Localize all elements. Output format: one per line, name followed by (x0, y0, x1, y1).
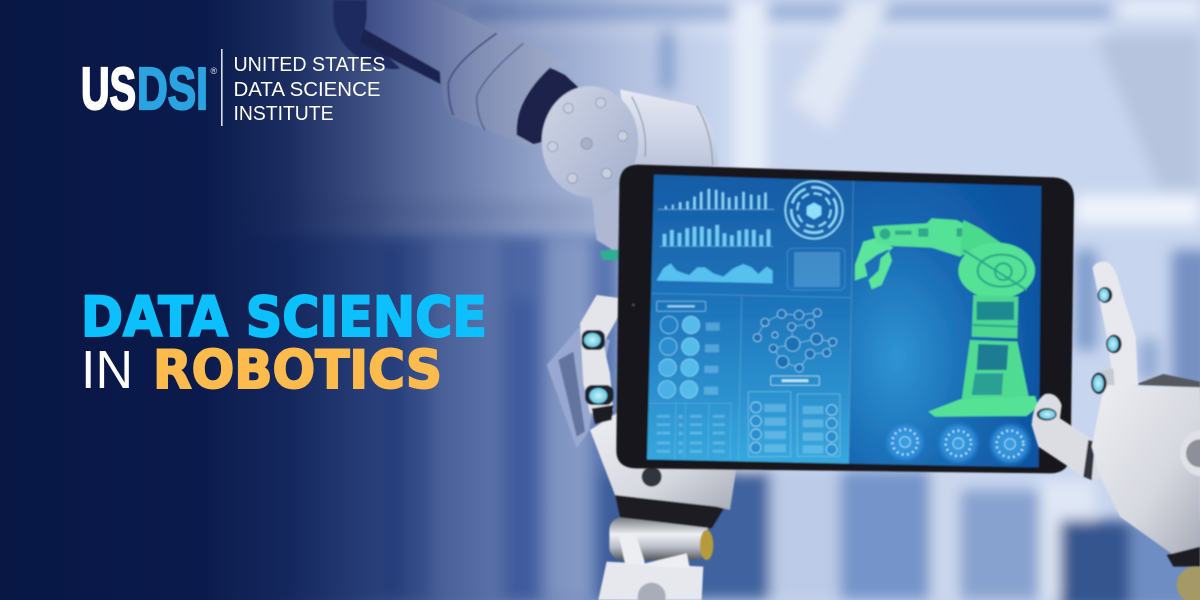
thumb (1032, 394, 1100, 480)
wrist band and hinge (1167, 547, 1200, 567)
usdsi logo: DSI (137, 56, 208, 122)
registered mark: ® (210, 66, 218, 76)
second finger stub (1094, 368, 1115, 397)
green robot arm hologram (855, 218, 1038, 417)
round joint (542, 86, 638, 197)
title: IN (81, 340, 133, 400)
robot arm, upper (333, 0, 718, 260)
gripper (855, 238, 893, 289)
screen right half (849, 181, 1041, 467)
knuckle band (1138, 374, 1200, 387)
fingers (580, 295, 622, 413)
info cards (748, 392, 840, 457)
data table (649, 403, 732, 459)
network diagram (753, 309, 837, 372)
robot right hand (1032, 262, 1200, 600)
upper cylinder (363, 0, 500, 87)
logo wordmark: US (81, 56, 136, 122)
index finger (1093, 262, 1138, 387)
title (81, 285, 487, 401)
dark wrist band (615, 493, 725, 528)
robot left hand (547, 295, 737, 600)
usdsi logo (81, 49, 386, 126)
panel divider lines (652, 181, 853, 464)
bar chart 2 (659, 225, 773, 247)
palm (1092, 385, 1200, 555)
tablet (616, 165, 1074, 473)
bar chart 1 (658, 189, 774, 210)
chrome wrist hinge (609, 517, 708, 560)
rear arm section (333, 0, 400, 69)
logo name text: INSTITUTE (234, 102, 334, 125)
title: ROBOTICS (153, 340, 442, 401)
pie chart grid (658, 316, 700, 398)
pedestal (962, 340, 1029, 400)
folded panel (547, 328, 610, 448)
second header pill (771, 376, 819, 385)
base plate (928, 396, 1038, 417)
header pill (657, 301, 706, 311)
pie chart legends (704, 323, 720, 395)
column (972, 295, 1018, 338)
forearm detail (880, 228, 968, 239)
forearm (873, 218, 979, 257)
upper link (960, 220, 1035, 272)
cylinder body (620, 89, 718, 187)
data text block (787, 248, 845, 290)
palm speaker (1180, 430, 1200, 477)
bottom dial icons (882, 419, 1033, 467)
wrist block (598, 562, 703, 600)
logo name text (234, 53, 386, 125)
screen left half (647, 175, 853, 464)
neck below the joint (592, 193, 618, 253)
circular radar gauge (785, 181, 843, 239)
joint bolts (548, 98, 628, 183)
black bellows (517, 68, 578, 144)
tablet camera (632, 304, 634, 306)
area chart (657, 263, 773, 283)
logo name text: UNITED STATES (234, 53, 386, 76)
collar rings (441, 33, 569, 146)
shoulder (958, 243, 1035, 299)
logo name text: DATA SCIENCE (234, 78, 380, 101)
palm (590, 413, 737, 510)
title: DATA SCIENCE (81, 285, 487, 349)
tablet body (616, 165, 1074, 473)
logo divider (221, 49, 223, 126)
